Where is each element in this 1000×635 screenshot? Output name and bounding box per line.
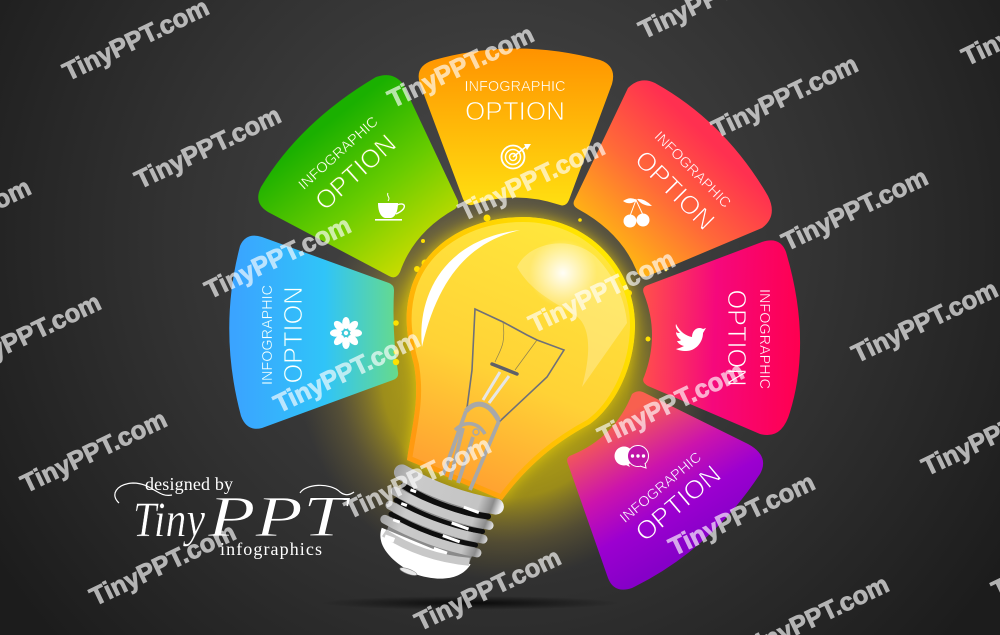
watermark layer: TinyPPT.com bbox=[778, 163, 932, 257]
yellow panel heading: OPTION bbox=[465, 96, 565, 126]
panel: yellow option bbox=[419, 48, 613, 205]
pink panel heading: INFOGRAPHIC bbox=[756, 289, 772, 389]
icon: chat bubbles bbox=[614, 446, 648, 468]
red panel heading: INFOGRAPHIC bbox=[651, 129, 733, 211]
glow behind bulb bbox=[300, 170, 710, 580]
watermark layer: TinyPPT.com bbox=[131, 101, 285, 195]
watermark layer: TinyPPT.com bbox=[201, 211, 355, 305]
watermark layer: TinyPPT.com bbox=[17, 405, 171, 499]
icon: bird bbox=[676, 324, 706, 351]
blue panel heading: INFOGRAPHIC bbox=[260, 285, 276, 385]
logo: designed by TinyPPT infographics: infographics bbox=[220, 539, 322, 559]
watermark layer: TinyPPT.com bbox=[665, 468, 819, 562]
panel: purple option bbox=[567, 391, 763, 590]
watermark layer: TinyPPT.com bbox=[455, 133, 609, 227]
purple panel heading: INFOGRAPHIC bbox=[617, 449, 705, 527]
watermark layer: TinyPPT.com bbox=[341, 431, 495, 525]
bulb glass bbox=[407, 217, 635, 500]
panel: green option bbox=[258, 75, 458, 277]
filament wires bbox=[443, 309, 564, 490]
yellow panel heading bbox=[464, 79, 566, 126]
logo: designed by TinyPPT infographics: designed by bbox=[145, 474, 233, 494]
yellow sparkle dots bbox=[393, 214, 667, 365]
logo: designed by TinyPPT infographics bbox=[115, 474, 354, 559]
icon: flower bbox=[330, 317, 362, 349]
watermark layer: TinyPPT.com bbox=[411, 543, 565, 635]
blue panel heading: OPTION bbox=[278, 286, 308, 384]
watermark layer: TinyPPT.com bbox=[594, 357, 748, 451]
white crescent shine bbox=[421, 230, 520, 347]
watermark layer: TinyPPT.com bbox=[86, 518, 240, 612]
watermark layer: TinyPPT.com bbox=[525, 245, 679, 339]
lightbulb bbox=[370, 217, 635, 594]
logo: designed by TinyPPT infographics: Tiny bbox=[133, 491, 206, 547]
yellow panel heading: INFOGRAPHIC bbox=[464, 79, 566, 95]
watermark layer: TinyPPT.com bbox=[848, 275, 1000, 369]
blue panel heading bbox=[260, 285, 308, 385]
icon: cherries bbox=[623, 198, 652, 228]
red panel heading: OPTION bbox=[629, 144, 721, 236]
watermark layer: TinyPPT.com bbox=[384, 20, 538, 114]
logo: designed by TinyPPT infographics: PPT bbox=[207, 484, 351, 549]
panel: blue option bbox=[229, 236, 398, 429]
watermark layer: TinyPPT.com bbox=[708, 50, 862, 144]
purple panel heading: OPTION bbox=[629, 459, 727, 547]
base cap bbox=[371, 528, 472, 591]
green panel heading: INFOGRAPHIC bbox=[296, 114, 382, 193]
highlight reflection bbox=[517, 243, 627, 387]
pink panel heading bbox=[722, 289, 772, 389]
icon: coffee cup bbox=[375, 193, 404, 221]
green panel heading: OPTION bbox=[309, 128, 402, 216]
icon: target with arrow bbox=[502, 144, 531, 168]
floor shadow under bulb bbox=[320, 596, 620, 610]
watermark layer: TinyPPT.com bbox=[270, 325, 424, 419]
pink panel heading: OPTION bbox=[722, 290, 752, 386]
hot spot bbox=[529, 239, 597, 307]
panel: pink option bbox=[643, 240, 800, 435]
bulb screw base bbox=[370, 472, 496, 594]
panel: red option bbox=[574, 80, 772, 277]
